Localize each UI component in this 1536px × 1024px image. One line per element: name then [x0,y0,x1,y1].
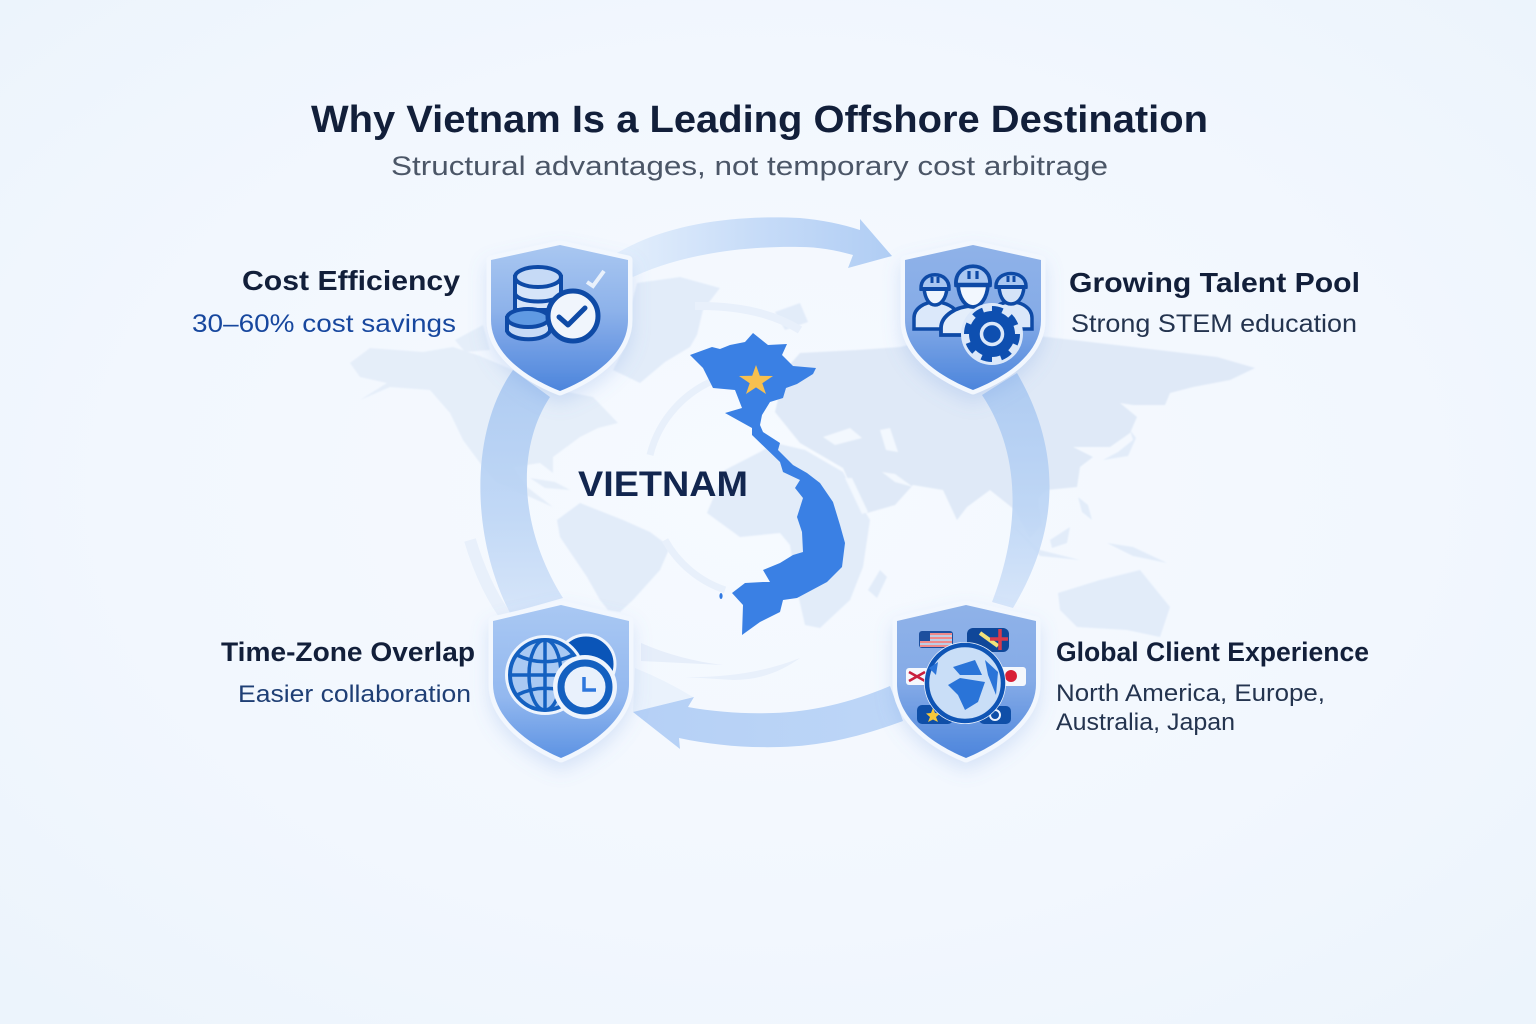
Greenland [613,277,720,383]
Phu Quoc island [719,593,723,599]
faint wedge beside bottom arrow [633,668,693,712]
faint wedge under bottom band [641,643,723,665]
Africa [707,443,870,628]
decorative rings around Vietnam [470,306,800,622]
icon: UK and Australia flag [967,628,1009,652]
icon: Japan flag [1000,667,1026,686]
icon: left worker [914,275,958,329]
panel: talent pool text [1069,267,1360,338]
subtitle: Structural advantages, not temporary cost arbitrage [391,151,1108,181]
icon: small white check [587,271,604,286]
text: STEM education: Strong STEM education [1071,310,1357,338]
star [739,365,773,394]
Madagascar [868,570,887,598]
South America [557,503,670,612]
icon: shield time-zone overlap [493,605,629,758]
heading: cost efficiency: Cost Efficiency [242,265,460,296]
icon: earth globe [924,642,1006,724]
panel: time-zone text [221,637,475,708]
North America [350,347,618,507]
Philippines [1078,497,1092,520]
heading: time-zone overlap: Time-Zone Overlap [221,637,475,667]
world map background [350,277,1255,637]
arrow: top arc pointing to growing talent pool [617,217,892,277]
Borneo [1050,527,1070,548]
New Guinea [1107,543,1167,563]
icon: globe [505,635,585,715]
icon: shield global client experience [897,605,1036,758]
icon: left flag [906,668,929,685]
text: easier collaboration: Easier collaboration [238,681,471,708]
Vietnam silhouette [690,333,845,635]
title: Why Vietnam Is a Leading Offshore Destination [311,99,1208,141]
Caribbean islands [530,478,570,490]
text: regions line 2: Australia, Japan [1056,709,1235,736]
Vietnam map [690,333,845,635]
icon: dark crescent [557,635,615,693]
heading: global client experience: Global Client Experience [1056,637,1369,667]
Australia [1058,570,1170,637]
icon: coin stack [507,267,561,339]
Scandinavia [775,303,808,330]
icon: EU flag [917,705,953,724]
text: regions line 1: North America, Europe, [1056,680,1325,707]
icon: gear [961,303,1023,365]
Japan [1103,430,1136,460]
heading: growing talent pool: Growing Talent Pool [1069,267,1360,298]
icon: clock [553,655,617,719]
Eurasia [775,330,1255,538]
icon: check badge [548,291,598,341]
icon: right worker [990,274,1032,329]
panel: cost efficiency text [192,265,460,338]
Sumatra and Java [1012,525,1080,560]
faint wedge lower band [685,658,800,680]
inland seas [823,428,913,514]
arrow: right arc from talent pool to global client experience [982,373,1050,608]
arrow: left arc from cost efficiency to time-zone overlap [480,370,563,613]
Arctic islands [455,325,490,352]
icon: shield cost efficiency [491,245,628,391]
icon: center worker [941,266,1008,335]
arrow: bottom arc pointing to time-zone overlap [633,686,903,749]
text: cost savings: 30–60% cost savings [192,310,456,338]
icon: bottom right flag [979,706,1011,724]
label: VIETNAM: VIETNAM [578,465,748,504]
icon: shield talent pool [905,245,1041,390]
icon: US flag [919,631,953,648]
panel: global client text [1056,637,1369,736]
